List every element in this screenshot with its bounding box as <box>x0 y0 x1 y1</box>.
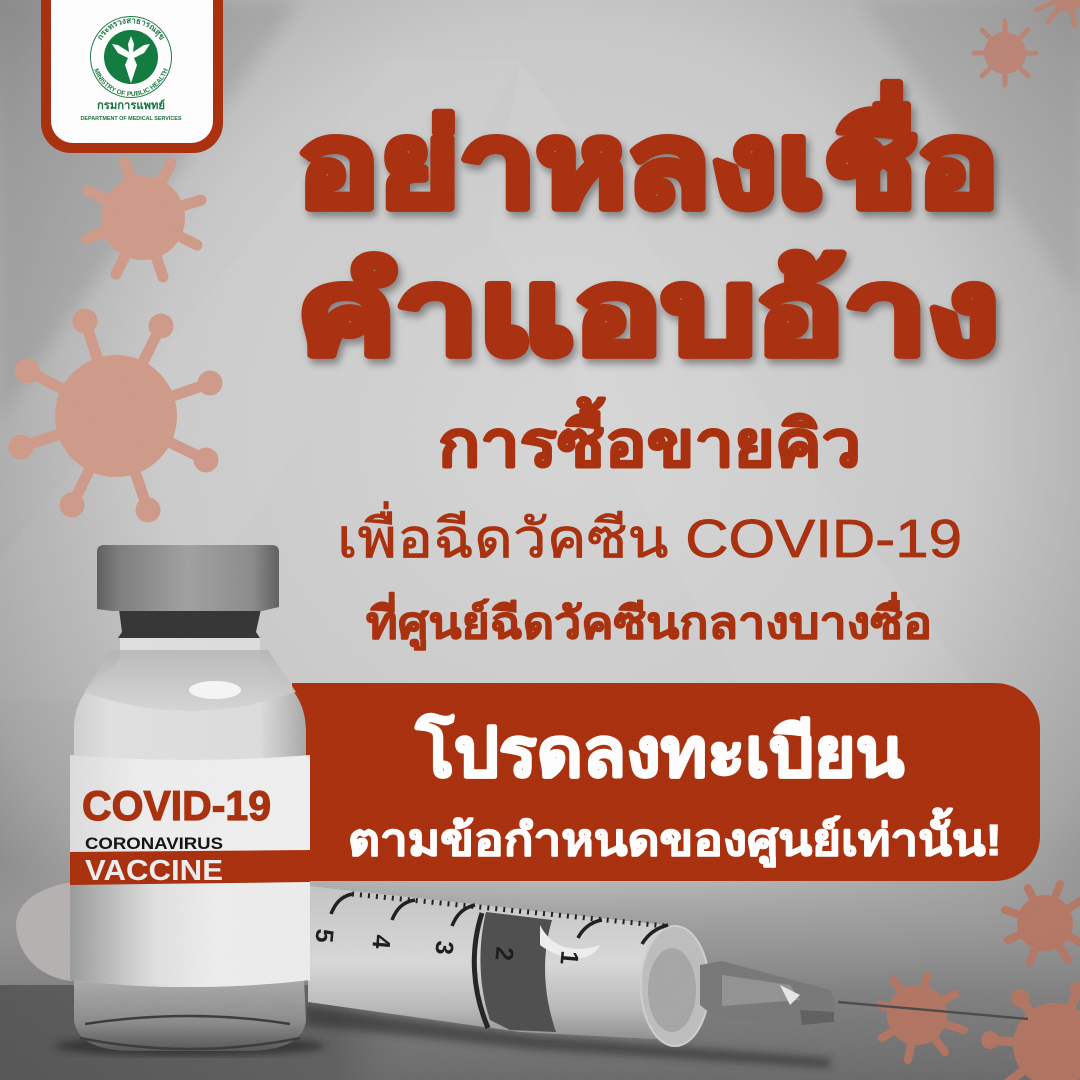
glass body <box>74 636 306 800</box>
barrel <box>308 886 672 1040</box>
callout panel: ตามข้อกำหนดของศูนย์เท่านั้น! <box>348 807 1002 867</box>
pale round object behind vial <box>16 882 72 981</box>
virus: bottom right <box>981 982 1080 1080</box>
label text: COVID-19 <box>82 782 271 829</box>
logo panel <box>41 0 223 153</box>
scale numbers: 4 <box>366 934 396 950</box>
scale numbers: 1 <box>554 950 584 966</box>
syringe <box>308 886 1028 1046</box>
callout panel: โปรดลงทะเบียน <box>415 713 904 791</box>
logo seal: กระทรวงสาธารณสุข <box>98 18 164 40</box>
plunger <box>480 912 556 1032</box>
virus: top right <box>974 21 1036 85</box>
title: คำแอบอ้าง <box>297 247 999 379</box>
cap <box>97 545 279 611</box>
scale numbers <box>309 928 584 966</box>
shadow of vial and syringe <box>55 1006 830 1068</box>
title <box>297 83 999 379</box>
label stripe <box>70 850 310 885</box>
virus: large left <box>8 308 222 522</box>
virus: upper left <box>86 162 201 277</box>
subtitle: การซื้อขายคิว <box>438 397 861 480</box>
scale <box>331 894 668 944</box>
label <box>70 755 310 987</box>
vaccine vial: CORONAVIRUS <box>85 834 223 853</box>
callout panel <box>292 683 1040 881</box>
logo seal: MINISTRY OF PUBLIC HEALTH <box>94 68 168 96</box>
logo text: กรมการแพทย์ <box>97 99 165 112</box>
needle <box>838 1002 1028 1019</box>
logo seal <box>90 16 172 98</box>
scale numbers: 2 <box>489 946 519 962</box>
base rim <box>80 1016 300 1049</box>
flange <box>641 926 709 1046</box>
virus: bottom centre right <box>880 976 964 1060</box>
subtitle: ที่ศูนย์ฉีดวัคซีนกลางบางซื่อ <box>366 592 932 650</box>
title: อย่าหลงเชื่อ <box>297 83 999 232</box>
label lower shade <box>70 884 310 987</box>
subtitle <box>337 397 962 650</box>
vaccine vial <box>70 545 310 1051</box>
neck <box>118 609 261 638</box>
glass base <box>74 980 306 1051</box>
subtitle: เพื่อฉีดวัคซีน COVID-19 <box>337 501 962 569</box>
hub <box>700 961 836 1024</box>
virus: lower right <box>1005 884 1080 962</box>
vaccine vial: VACCINE <box>85 855 223 887</box>
scale numbers: 5 <box>309 928 339 944</box>
logo panel: DEPARTMENT OF MEDICAL SERVICES <box>80 116 182 122</box>
virus: top right corner <box>1036 0 1080 26</box>
scale numbers: 3 <box>429 940 459 956</box>
